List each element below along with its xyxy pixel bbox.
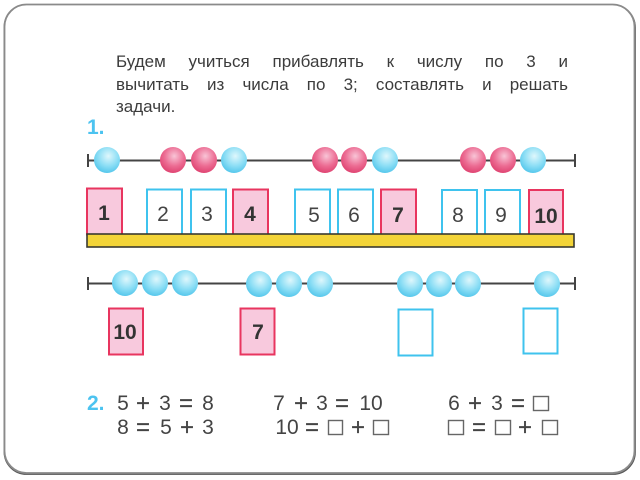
intro text: Будем учиться прибавлять к числу по 3 и	[116, 52, 568, 71]
equations column 2: 10	[275, 416, 299, 439]
equations column 1: =	[136, 414, 150, 441]
number cards 1 to 10: 7	[392, 204, 404, 227]
exercise 2 number: 2.	[87, 392, 105, 415]
equations column 3: +	[518, 414, 532, 441]
lower cards	[109, 308, 558, 356]
equations column 1: 5	[117, 392, 129, 415]
equations column 2	[273, 390, 388, 441]
number cards 1 to 10: 8	[452, 204, 464, 227]
equations column 1: =	[179, 390, 193, 417]
equations column 3: +	[468, 390, 482, 417]
equations column 1: 3	[159, 392, 171, 415]
intro text: задачи.	[116, 97, 175, 116]
equations column 2: +	[294, 390, 308, 417]
number cards 1 to 10: 2	[157, 203, 169, 226]
number cards 1 to 10	[87, 188, 563, 235]
equations column 3: =	[472, 414, 486, 441]
number cards 1 to 10: 5	[308, 204, 320, 227]
lower cards: 7	[252, 321, 264, 344]
number cards 1 to 10: 3	[201, 203, 213, 226]
number cards 1 to 10: 9	[495, 204, 507, 227]
abacus bottom	[88, 270, 575, 297]
number cards 1 to 10: 6	[348, 204, 360, 227]
number cards 1 to 10: 4	[244, 203, 256, 226]
number cards 1 to 10: 10	[534, 205, 558, 228]
equations column 2: =	[335, 390, 349, 417]
equations column 2: 7	[273, 392, 285, 415]
equations column 2: 10	[359, 392, 383, 415]
equations column 1: 5	[160, 416, 172, 439]
equations column 3: 6	[448, 392, 460, 415]
yellow shelf	[87, 234, 574, 247]
exercise 1 number: 1.	[87, 116, 105, 139]
equations column 1: 8	[202, 392, 214, 415]
equations column 2: 3	[316, 392, 328, 415]
intro text	[116, 52, 568, 116]
equations column 1	[117, 390, 214, 441]
equations column 3	[448, 390, 558, 441]
intro text: вычитать из числа по 3; составлять и решать	[116, 75, 568, 94]
equations column 3: =	[511, 390, 525, 417]
equations column 2: =	[305, 414, 319, 441]
equations column 3: 3	[491, 392, 503, 415]
equations column 2: +	[351, 414, 365, 441]
lower cards: 10	[113, 321, 137, 344]
number cards 1 to 10: 1	[98, 202, 110, 225]
equations column 1: +	[136, 390, 150, 417]
abacus top	[88, 147, 575, 173]
equations column 1: 3	[202, 416, 214, 439]
equations column 1: 8	[117, 416, 129, 439]
equations column 1: +	[180, 414, 194, 441]
